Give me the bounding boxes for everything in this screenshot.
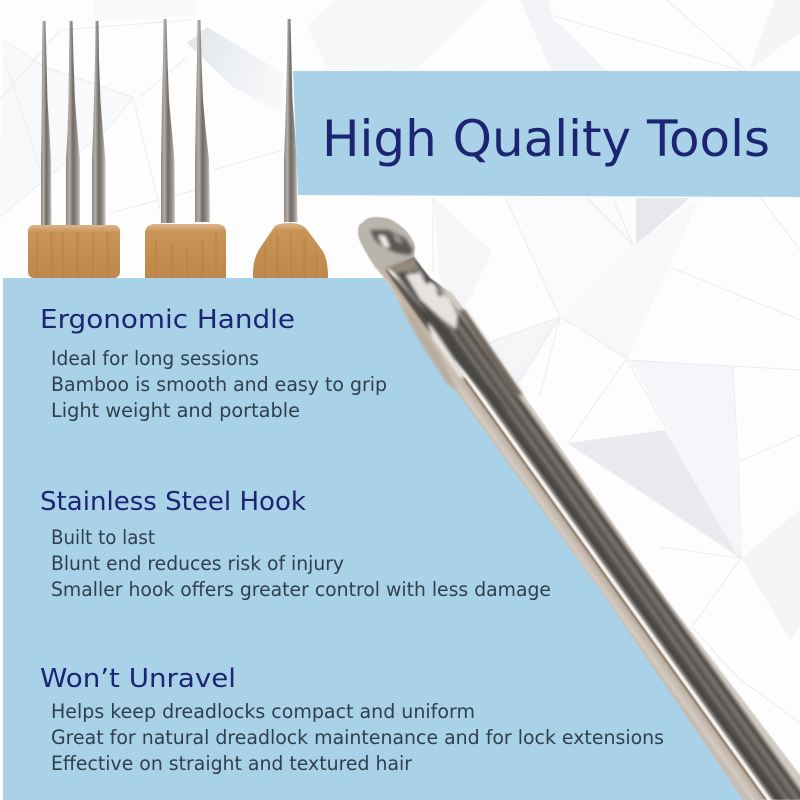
bullet list bbox=[51, 526, 551, 601]
bullet list: Bamboo is smooth and easy to grip bbox=[51, 373, 387, 396]
bullet list bbox=[51, 347, 387, 422]
heading: Won’t Unravel bbox=[40, 664, 236, 694]
panel: features background bbox=[3, 278, 760, 800]
bullet list: Light weight and portable bbox=[51, 399, 300, 422]
title banner bbox=[293, 71, 800, 197]
shaft bbox=[375, 257, 800, 800]
large hook close-up bbox=[358, 217, 800, 800]
hook head bbox=[358, 217, 415, 270]
section: ergonomic handle bbox=[40, 305, 387, 422]
section: stainless steel hook bbox=[40, 487, 551, 601]
heading: Stainless Steel Hook bbox=[40, 487, 306, 517]
tool handle: double hook bbox=[145, 19, 226, 278]
bullet list bbox=[51, 700, 664, 775]
bullet list: Great for natural dreadlock maintenance and for lock extensions bbox=[51, 726, 664, 749]
bullet list: Built to last bbox=[51, 526, 155, 549]
bullet list: Smaller hook offers greater control with less damage bbox=[51, 578, 551, 601]
bullet list: Helps keep dreadlocks compact and uniform bbox=[51, 700, 475, 723]
bullet list: Effective on straight and textured hair bbox=[51, 752, 413, 775]
title: High Quality Tools bbox=[322, 110, 770, 168]
bullet list: Ideal for long sessions bbox=[51, 347, 259, 370]
section: won't unravel bbox=[40, 664, 664, 775]
small tools: bamboo dreadlock needles bbox=[28, 19, 328, 278]
tool handle: triple hook bbox=[28, 21, 120, 278]
tool handle: single hook bbox=[253, 19, 328, 278]
hook details bbox=[370, 230, 523, 412]
bullet list: Blunt end reduces risk of injury bbox=[51, 552, 344, 575]
heading: Ergonomic Handle bbox=[40, 305, 295, 335]
